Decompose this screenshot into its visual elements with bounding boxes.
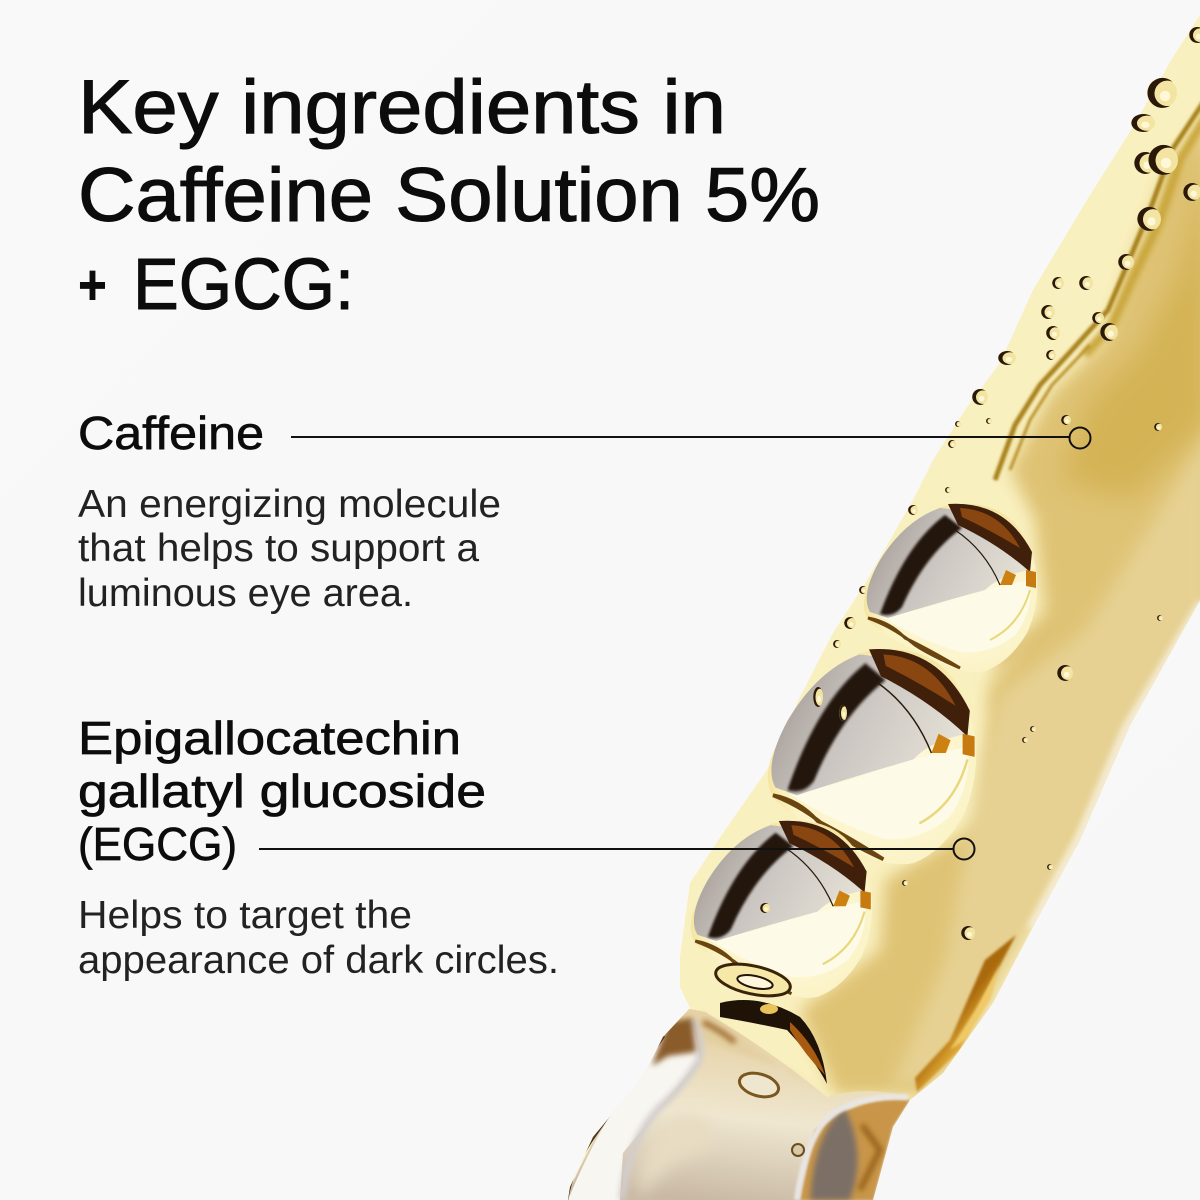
bubble: middle bbox=[768, 649, 976, 864]
tip bubble bbox=[738, 1072, 780, 1098]
heading: EGCG: gallatyl glucoside bbox=[78, 765, 486, 817]
lighter lower-right band bbox=[890, 430, 1200, 1090]
pale right edge bbox=[1035, 605, 1200, 930]
heading: Caffeine: Caffeine bbox=[78, 407, 264, 459]
title: Key ingredients in bbox=[78, 65, 726, 150]
text: EGCG description bbox=[78, 894, 559, 982]
heading: EGCG: Epigallocatechin bbox=[78, 712, 461, 764]
clear dropper tip bbox=[565, 1008, 910, 1200]
ridge lines bbox=[995, 100, 1200, 480]
bubble: bottom lump bbox=[713, 958, 827, 1084]
heading: EGCG: (EGCG) bbox=[78, 818, 237, 870]
text: EGCG description: Helps to target the bbox=[78, 894, 412, 937]
text: Caffeine description: luminous eye area. bbox=[78, 572, 413, 615]
text: EGCG description: appearance of dark circles. bbox=[78, 939, 559, 982]
left glass region bbox=[568, 1020, 700, 1200]
text: Caffeine description: An energizing molecule bbox=[78, 483, 501, 526]
title: EGCG: bbox=[133, 245, 354, 325]
small bubbles bbox=[760, 27, 1200, 940]
title: Caffeine Solution 5% bbox=[78, 153, 820, 238]
image: serum dropper stream with bubbles bbox=[565, 15, 1200, 1200]
callout line: EGCG bbox=[259, 838, 974, 860]
bubble: top bbox=[864, 504, 1037, 672]
bubble: lower bbox=[691, 821, 872, 998]
text: Caffeine description: that helps to support a bbox=[78, 527, 479, 570]
right amber tip bbox=[800, 1099, 910, 1200]
title bbox=[78, 65, 820, 325]
title: + bbox=[79, 255, 106, 315]
callout line: Caffeine bbox=[291, 428, 1090, 448]
amber streak bbox=[915, 935, 1016, 1092]
heading: EGCG bbox=[78, 712, 486, 870]
gold core of the serum bbox=[800, 120, 1200, 1095]
text: Caffeine description bbox=[78, 483, 501, 615]
